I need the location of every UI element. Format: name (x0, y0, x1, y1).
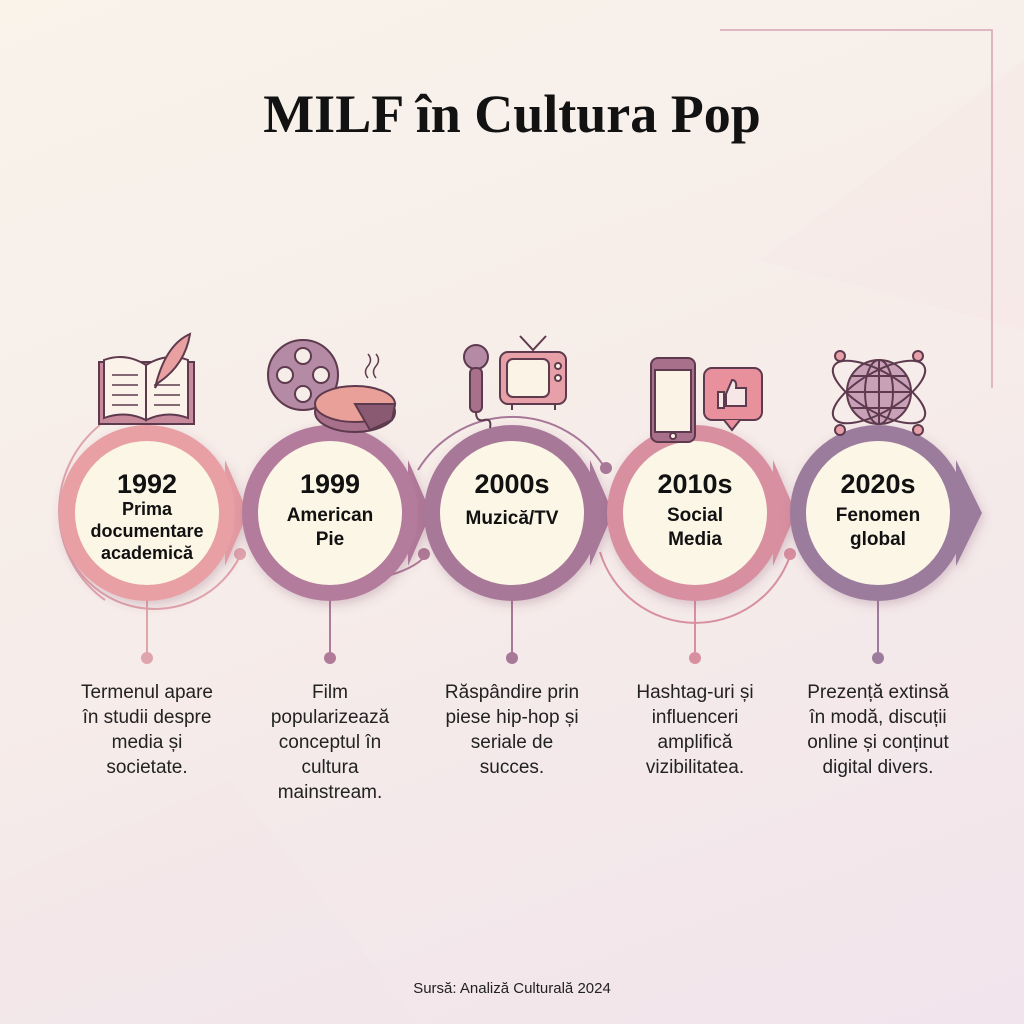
description 2020s: online și conținut (807, 732, 949, 753)
description 1992: Termenul apare (81, 682, 213, 703)
stage 1999: 1999 (300, 469, 360, 499)
stage 1992: Prima (122, 499, 173, 519)
stage 1999 (242, 425, 431, 664)
stage 2010s: Media (668, 529, 722, 550)
stage 2000s: Muzică/TV (466, 508, 559, 529)
description 2000s: Răspândire prin (445, 682, 579, 703)
description 1992: societate. (106, 757, 188, 778)
description 1999: conceptul în (279, 732, 381, 753)
stage 2010s (607, 425, 796, 664)
stage 1999: American (287, 505, 373, 526)
description 1999: popularizează (271, 707, 390, 728)
description 1992: în studii despre (82, 707, 211, 728)
icon: globe (824, 349, 934, 435)
description 2010s: influenceri (652, 707, 738, 728)
icon: phone and like (651, 358, 762, 442)
stage 2000s: 2000s (474, 469, 550, 499)
description 1999: Film (312, 682, 348, 703)
stage 1999: Pie (316, 529, 344, 550)
icon: film reel and pie (268, 340, 395, 432)
stage 2010s: 2010s (657, 469, 733, 499)
stage 2000s (424, 425, 613, 664)
description 2000s: succes. (480, 757, 544, 778)
description 2010s: Hashtag-uri și (636, 682, 754, 703)
description 2000s: piese hip-hop și (445, 707, 579, 728)
icon: book and quill (99, 334, 194, 424)
description 2010s: vizibilitatea. (646, 757, 744, 778)
connector arcs (59, 417, 796, 623)
description 2000s: seriale de (471, 732, 553, 753)
timeline stages (59, 425, 982, 664)
description 2010s: amplifică (658, 732, 733, 753)
description 1999: cultura (301, 757, 359, 778)
stage 2020s: global (850, 529, 906, 550)
title: MILF în Cultura Pop (263, 84, 761, 144)
description 2020s: Prezență extinsă (807, 682, 949, 703)
stage 2020s: Fenomen (836, 505, 920, 526)
stage 2020s: 2020s (840, 469, 916, 499)
decorative corner frame (720, 30, 992, 388)
description 2020s: în modă, discuții (808, 707, 947, 728)
source: Sursă: Analiză Culturală 2024 (413, 980, 611, 997)
description 1992: media și (112, 732, 182, 753)
description 2020s: digital divers. (823, 757, 933, 778)
stage 2020s (790, 425, 982, 664)
icon: microphone and TV (464, 336, 566, 428)
stage 1992: documentare (90, 521, 204, 541)
descriptions (81, 682, 949, 803)
stage 1992: 1992 (117, 469, 177, 499)
stage 1992: academică (101, 543, 194, 563)
description 1999: mainstream. (278, 782, 382, 803)
stage 2010s: Social (667, 505, 723, 526)
stage 1992 (59, 425, 248, 664)
